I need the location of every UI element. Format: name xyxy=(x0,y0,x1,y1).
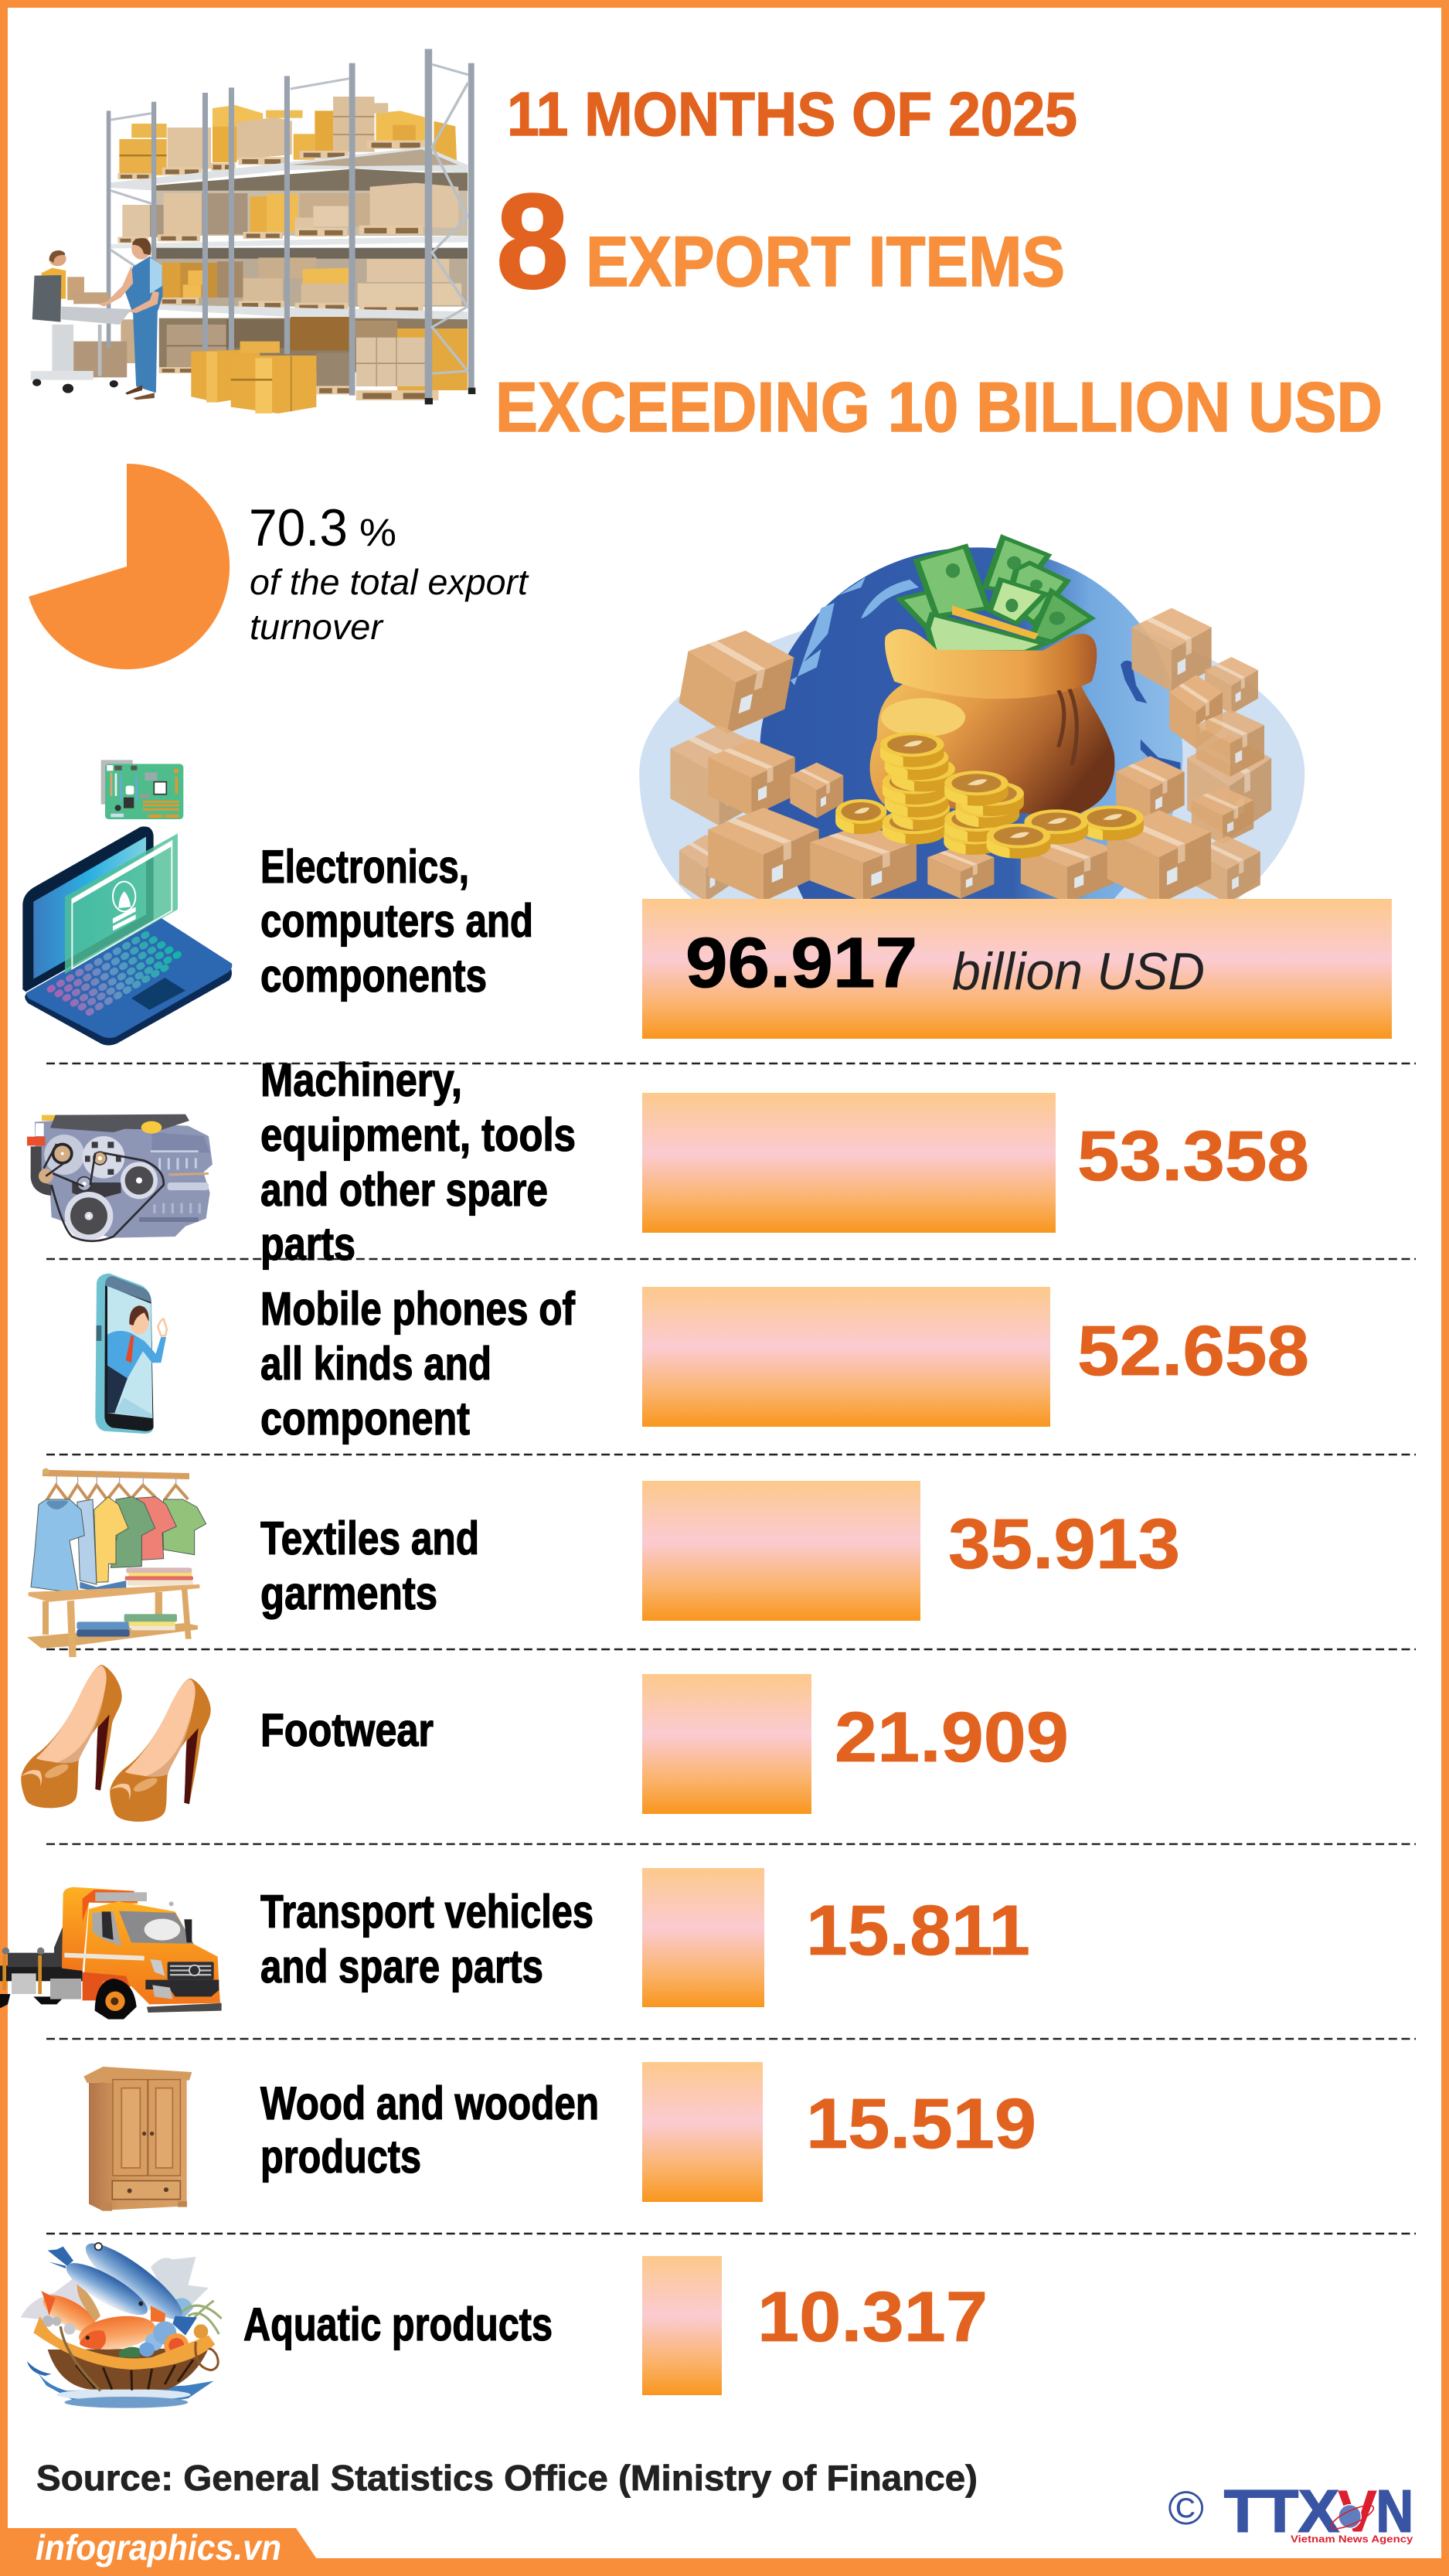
wordmark N: N xyxy=(1376,2479,1413,2545)
title xyxy=(495,80,1383,447)
title line: period: 11 MONTHS OF 2025 xyxy=(507,80,1077,148)
label: Footwear xyxy=(260,1704,434,1756)
wordmark: TTX xyxy=(1224,2479,1339,2545)
value: 35.913 xyxy=(948,1505,1180,1584)
label: all kinds and xyxy=(260,1338,492,1390)
pie chart: 70.3 percent xyxy=(29,464,230,669)
illustration: money bag, globe and parcels xyxy=(639,537,1304,904)
title line: exceeding: EXCEEDING 10 BILLION USD xyxy=(495,369,1383,447)
share callout: % xyxy=(359,511,396,554)
standing worker xyxy=(98,238,163,400)
bar xyxy=(642,899,1392,1039)
orange fish front xyxy=(77,2305,165,2354)
icon: engine xyxy=(27,1114,213,1241)
unit: billion USD xyxy=(952,942,1205,1001)
icon: truck xyxy=(0,1887,222,2020)
row: electronics xyxy=(22,760,1392,1045)
label: and spare parts xyxy=(260,1941,543,1992)
label xyxy=(260,1886,594,1992)
value: 21.909 xyxy=(835,1698,1069,1777)
icon: laptop xyxy=(22,826,232,1045)
bar xyxy=(642,1868,764,2007)
row: footwear xyxy=(21,1665,1069,1822)
label: Wood and wooden xyxy=(260,2077,599,2129)
bar xyxy=(642,2062,763,2202)
title line: export items: EXPORT ITEMS xyxy=(586,223,1065,301)
copyright mark: © xyxy=(1168,2482,1204,2535)
banknotes xyxy=(900,537,1092,652)
value: 96.917 xyxy=(685,924,917,1002)
logo: TTXVN xyxy=(1168,2479,1413,2545)
label: components xyxy=(260,950,487,1002)
icon: smartphone with man xyxy=(95,1274,167,1434)
wordmark V: V xyxy=(1338,2479,1378,2545)
row: textiles xyxy=(27,1468,1180,1657)
blue fish lower xyxy=(48,2247,154,2324)
label: and other spare xyxy=(260,1164,548,1216)
row: mobile phones xyxy=(95,1274,1309,1445)
label xyxy=(260,841,533,1002)
row: aquatic xyxy=(21,2233,988,2408)
label xyxy=(260,1513,479,1619)
label: Machinery, xyxy=(260,1054,462,1106)
label: Textiles and xyxy=(260,1513,479,1564)
bar xyxy=(642,1481,920,1621)
cart and monitor xyxy=(31,275,131,393)
share callout xyxy=(249,499,529,647)
coin stacks xyxy=(835,732,1144,859)
illustration: warehouse racks with workers xyxy=(31,49,475,413)
label: products xyxy=(260,2131,421,2183)
label: Electronics, xyxy=(260,841,469,893)
label: computers and xyxy=(260,895,533,947)
icon: high heels xyxy=(21,1665,211,1822)
bar xyxy=(642,1093,1056,1233)
row: machinery xyxy=(27,1054,1309,1270)
bar xyxy=(642,1674,811,1814)
value: 53.358 xyxy=(1077,1117,1309,1196)
value: 15.519 xyxy=(806,2084,1036,2163)
value: 52.658 xyxy=(1077,1312,1309,1390)
title number: 8: 8 xyxy=(496,165,569,316)
label: parts xyxy=(260,1218,355,1270)
source note: Source: General Statistics Office (Ministry of Finance) xyxy=(36,2458,978,2498)
label: Mobile phones of xyxy=(260,1283,576,1335)
footer tab xyxy=(0,2528,317,2576)
bar xyxy=(642,2256,722,2395)
globe emblem xyxy=(1328,2501,1376,2533)
label: component xyxy=(260,1393,470,1445)
label: Aquatic products xyxy=(243,2299,553,2350)
icon: wardrobe xyxy=(83,2067,192,2211)
agency name: Vietnam News Agency xyxy=(1291,2533,1413,2544)
label: equipment, tools xyxy=(260,1109,576,1161)
row: wood xyxy=(83,2062,1036,2211)
label xyxy=(260,2077,599,2183)
dividers xyxy=(46,1063,1416,2234)
value: 15.811 xyxy=(806,1891,1030,1970)
label: garments xyxy=(260,1567,437,1619)
seated worker xyxy=(42,250,66,299)
label xyxy=(260,1283,576,1445)
share callout: 70.3 xyxy=(249,499,348,557)
share callout: turnover xyxy=(250,607,384,647)
bar xyxy=(642,1287,1050,1427)
row: transport xyxy=(0,1868,1030,2020)
icon: clothes rack xyxy=(27,1468,206,1657)
blue fish upper xyxy=(77,2233,197,2336)
label xyxy=(260,1054,576,1270)
icon: fish basket xyxy=(21,2233,222,2408)
share callout: of the total export xyxy=(250,562,529,602)
sack xyxy=(870,680,1114,817)
value: 10.317 xyxy=(757,2278,988,2357)
website label: infographics.vn xyxy=(36,2527,281,2567)
label: Transport vehicles xyxy=(260,1886,594,1938)
icon: motherboard xyxy=(101,760,183,819)
